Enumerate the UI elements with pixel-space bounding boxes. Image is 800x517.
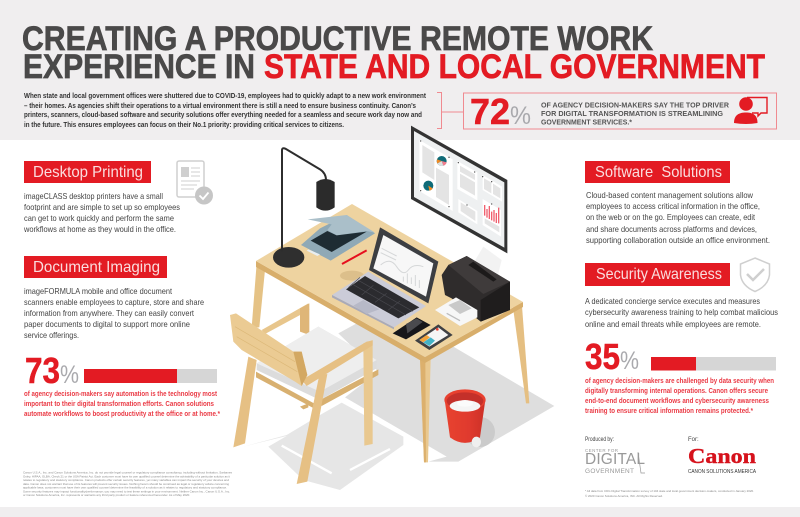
text: document imaging: service offerings. — [24, 330, 79, 340]
callout: 72 percent: FOR DIGITAL TRANSFORMATION IS STREAMLINING — [541, 110, 723, 118]
callout: 72 percent: GOVERNMENT SERVICES.* — [541, 118, 632, 126]
illustration: floor shadows, chair and bin — [230, 263, 554, 490]
callout: 72 percent: % — [510, 102, 531, 130]
legal disclaimer: Canon U.S.A., Inc. and Canon Solutions America, Inc. do not provide legal counsel or regulatory compliance consultancy, including without limitation, Sarbanes — [23, 470, 232, 474]
intro paragraph: printers, scanners, cloud-based software and security solutions offer everything needed for a seamless and secure work day now and — [24, 110, 422, 119]
callout: 72 percent: 72 — [470, 91, 510, 132]
illustration: desk — [256, 204, 523, 363]
intro paragraph: – their homes. As agencies shift their operations to a virtual environment there is still a need to ensure business continuity. Canon’s — [24, 101, 416, 110]
icon: shield with check — [740, 258, 770, 292]
icon: person with screen — [734, 97, 767, 124]
heading: desktop printing: Desktop Printing — [33, 164, 143, 181]
logo: canon solutions america: For: — [688, 437, 699, 443]
desk reflection — [340, 271, 364, 281]
text: software solutions — [586, 190, 770, 245]
text: software solutions: Cloud-based content management solutions allow — [586, 190, 754, 200]
icon: document with check — [177, 161, 213, 204]
text: security awareness: A dedicated concierge service executes and measures — [585, 296, 760, 306]
text: document imaging: paper documents to digital to support more online — [24, 319, 190, 329]
tablet — [415, 324, 453, 350]
legal disclaimer: Some security features may impact functionality/performance; you may need to test these settings in your environment. Neither Canon Inc., Canon U.S.A., Inc. — [23, 489, 230, 493]
text: desktop printing: workflows at home as they would in the office. — [23, 224, 176, 234]
logo: center for digital government: Produced by: — [585, 437, 614, 443]
logo: canon solutions america — [688, 437, 757, 475]
red pen — [342, 250, 367, 264]
stat: 73 percent — [24, 350, 220, 418]
title — [22, 20, 765, 86]
footer background band — [0, 507, 800, 517]
panel: software solutions — [585, 161, 770, 245]
desk front leg — [420, 358, 431, 462]
logo: center for digital government — [585, 437, 645, 475]
stat: 73 percent: 73 — [25, 350, 60, 391]
text: security awareness: cybersecurity awareness training to help combat malicious — [585, 307, 778, 317]
legal disclaimer: Oxley, HIPAA, GLBA, Check 21 or the USA Patriot Act. Each customer must have its own qualified counsel determine the advisability of a particular solution as it — [23, 474, 230, 478]
panel: desktop printing — [23, 161, 213, 234]
callout: 72 percent: OF AGENCY DECISION-MAKERS SAY THE TOP DRIVER — [541, 102, 729, 110]
heading: security awareness — [585, 263, 730, 286]
legal disclaimer: or Canon Solutions America, Inc. represents or warrants any third party product or feature referenced hereunder. As of May 2020. — [23, 493, 190, 497]
stat: 73 percent: % — [60, 361, 79, 389]
footnote: © 2020 Canon Solutions America, INC. All Rights Reserved. — [585, 494, 663, 498]
illustration: wall board — [411, 126, 507, 253]
legal disclaimer — [23, 470, 232, 497]
logo: canon solutions america: Canon — [688, 444, 756, 468]
text: document imaging: imageFORMULA mobile and office document — [24, 286, 173, 296]
legal disclaimer: data. Canon does not warrant that use of its features will prevent security issues. Nothing herein should be construed as legal or regulatory advice concerning — [23, 482, 229, 486]
text: desktop printing: footprint and are simple to set up so employees — [24, 202, 180, 212]
stat: 35 percent — [585, 336, 776, 415]
stat: 73 percent: automate workflows to boost productivity at the office or at home.* — [24, 409, 220, 418]
laptop — [332, 227, 438, 329]
desk shadow — [338, 323, 554, 462]
title: CREATING A PRODUCTIVE REMOTE WORK — [22, 20, 653, 58]
logo: center for digital government: GOVERNMENT — [585, 468, 634, 475]
logo: canon solutions america: CANON SOLUTIONS AMERICA — [688, 469, 757, 475]
illustration: lamp, scanner, pen — [273, 148, 375, 281]
lamp — [273, 148, 335, 268]
stat: 73 percent: of agency decision-makers say automation is the technology most — [24, 389, 217, 398]
text: desktop printing: imageCLASS desktop printers have a small — [24, 191, 163, 201]
pinned bar chart — [483, 199, 501, 237]
text: desktop printing: can get to work quickly and perform the same — [24, 213, 174, 223]
stat: 73 percent: important to their digital transformation efforts. Canon solutions — [24, 399, 214, 408]
header background band — [0, 0, 800, 140]
printer — [435, 247, 510, 326]
bar chart: 35 percent — [651, 357, 776, 370]
intro paragraph — [24, 91, 426, 129]
pinned report with pie charts — [419, 140, 453, 211]
text: software solutions: and share documents across platforms and devices, — [586, 224, 757, 234]
bracket connector — [437, 92, 463, 128]
chair shadow — [243, 403, 403, 490]
chair — [230, 303, 378, 484]
pinned notes — [457, 161, 502, 224]
text: software solutions: employees to access critical information in the office, — [586, 201, 760, 211]
heading: security awareness: Security Awareness — [596, 266, 722, 283]
text: software solutions: on the web or on the go. Employees can create, edit — [586, 212, 756, 222]
footnote: * All data from CDG Digital Transformation survey of 104 state and local government decision-makers, conducted in January 2020. — [585, 489, 754, 493]
scanner — [301, 215, 375, 261]
illustration: devices — [332, 227, 510, 350]
heading: software solutions: Software Solutions — [595, 164, 722, 181]
desk right leg — [513, 302, 529, 403]
heading: document imaging: Document Imaging — [33, 259, 160, 276]
title: EXPERIENCE IN — [23, 48, 255, 86]
callout: 72 percent — [464, 91, 776, 132]
text: security awareness: online and email threats while employees are remote. — [585, 319, 761, 329]
stat: 35 percent: 35 — [585, 336, 620, 377]
legal disclaimer: relates to regulatory and statutory compliance. Canon products offer certain security features, yet many variables can impact the security of your devices and — [23, 478, 229, 482]
text: software solutions: supporting collaboration outside an office environment. — [586, 235, 770, 245]
panel: document imaging — [24, 256, 220, 418]
logo: center for digital government: DIGITAL — [585, 451, 645, 468]
logo: center for digital government: CENTER FOR — [585, 448, 619, 453]
intro paragraph: When state and local government offices were shuttered due to COVID-19, employees had to quickly adapt to a new work environment — [24, 91, 426, 100]
desk left back leg — [252, 263, 265, 327]
text: document imaging — [24, 286, 204, 340]
waste bin — [444, 389, 495, 447]
intro paragraph: in the future. This ensures employees can focus on their No.1 priority: providing critical services to citizens. — [24, 120, 344, 129]
stat: 35 percent: training to ensure critical information remains protected.* — [585, 406, 753, 415]
legal disclaimer: applicable laws; customers must have their own qualified counsel determine the feasibility of a solution as it relates to regulatory and statutory compliance. — [23, 486, 227, 490]
footnote — [585, 489, 754, 498]
stat: 35 percent: % — [620, 347, 639, 375]
text: document imaging: scanners enable employees to capture, store and share — [24, 297, 204, 307]
text: document imaging: information from anywhere. They can easily convert — [24, 308, 195, 318]
text: desktop printing — [23, 191, 180, 234]
phone — [393, 317, 431, 339]
text: security awareness — [585, 296, 778, 329]
panel: security awareness — [585, 258, 778, 415]
bar chart: 73 percent — [84, 369, 217, 383]
